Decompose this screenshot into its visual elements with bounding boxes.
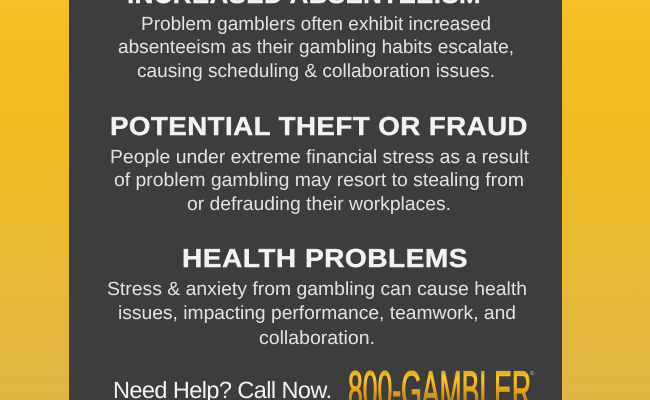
section: increased absenteeism [118,0,514,82]
body text: health problems: collaboration. [259,328,375,349]
body text: absenteeism [118,14,514,82]
body text: theft or fraud: People under extreme financial stress as a result [110,147,530,168]
body text: theft or fraud [110,147,530,215]
body text: theft or fraud: or defrauding their workplaces. [187,194,451,215]
registered mark: ® [530,370,535,377]
body text: absenteeism: absenteeism as their gambling habits escalate, [118,37,514,58]
section: health problems [107,243,527,349]
body text: absenteeism: Problem gamblers often exhibit increased [141,14,491,35]
body text: health problems: issues, impacting performance, teamwork, and [118,303,516,324]
body text: health problems [107,279,527,349]
dark central panel [69,0,562,400]
body text: theft or fraud: of problem gambling may resort to stealing from [114,170,524,191]
call to action [113,361,535,400]
heading: potential theft or fraud: POTENTIAL THEFT OR FRAUD [110,111,528,141]
section: potential theft or fraud [110,111,530,215]
heading: health problems: HEALTH PROBLEMS [182,243,468,273]
body text: health problems: Stress & anxiety from gambling can cause health [107,279,527,300]
body text: absenteeism: causing scheduling & collaboration issues. [137,61,495,82]
